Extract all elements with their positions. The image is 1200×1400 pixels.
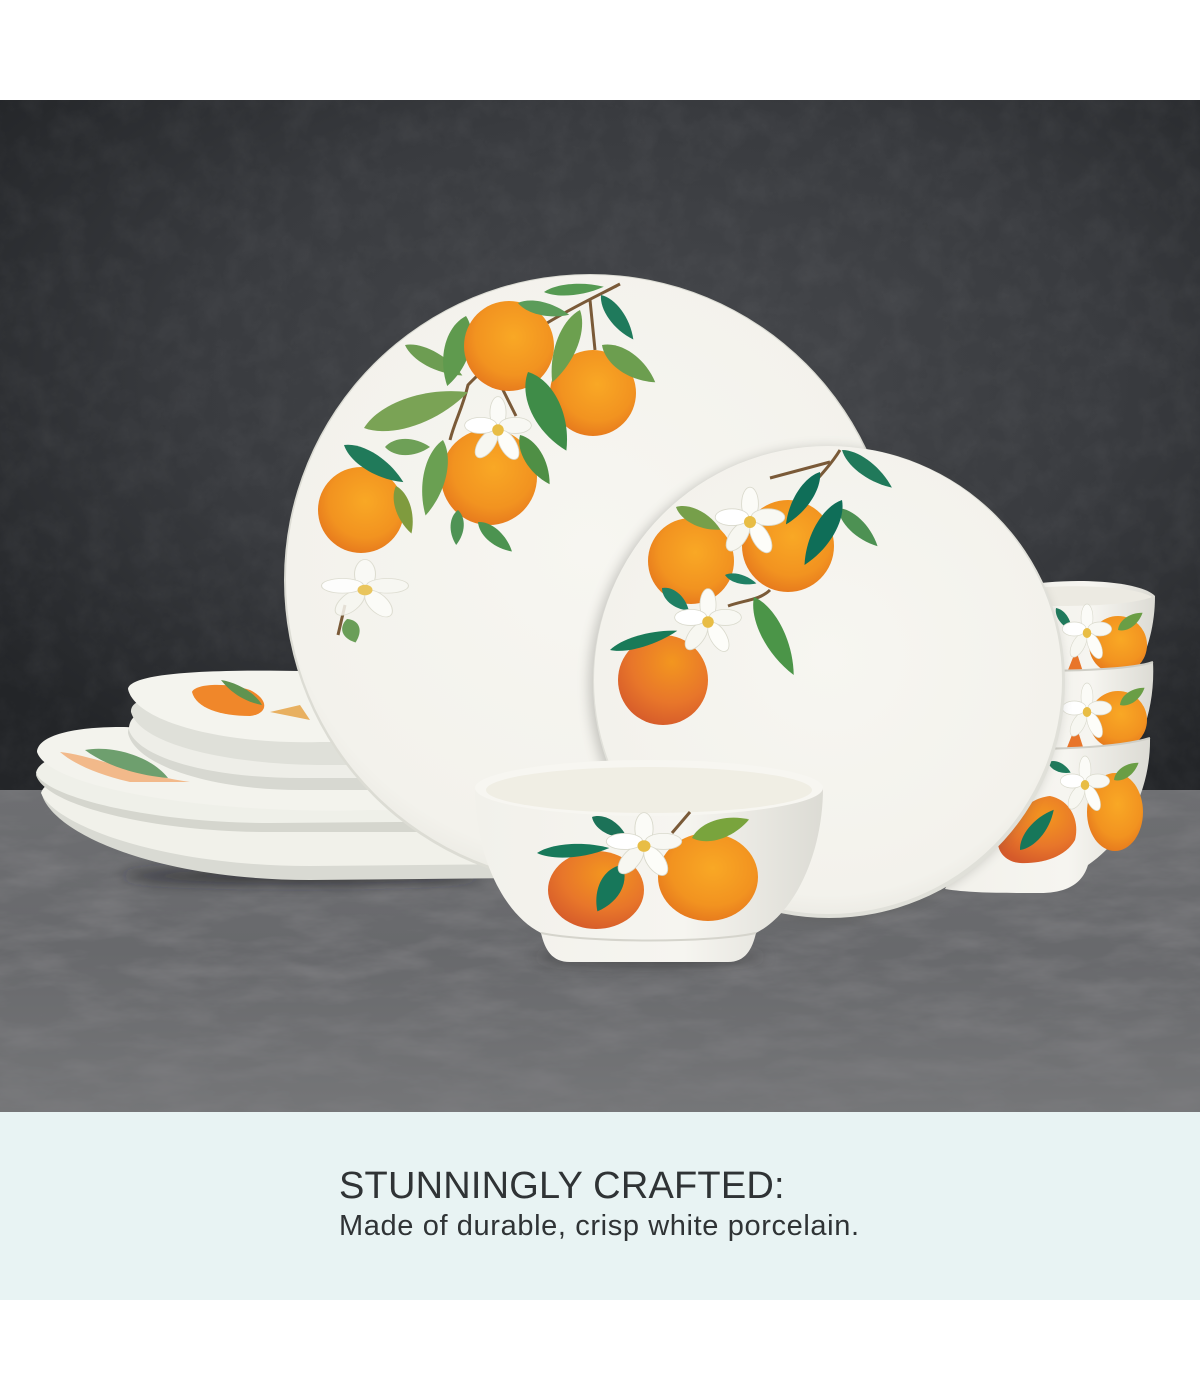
left stack of plates [36, 671, 520, 883]
top bowl [1000, 581, 1155, 680]
caption heading: STUNNINGLY CRAFTED: [339, 1165, 785, 1207]
large dinner plate [284, 274, 896, 886]
caption description: Made of durable, crisp white porcelain. [339, 1210, 860, 1242]
front bowl pattern: oranges and blossom [537, 810, 758, 929]
right stack of bowls [945, 581, 1155, 893]
table surface [0, 790, 1200, 1112]
salad plate pattern: branch with oranges [608, 444, 896, 725]
large plate pattern: branch with oranges [318, 281, 661, 645]
caption text [339, 1165, 860, 1242]
background wall [0, 100, 1200, 792]
salad plate [589, 444, 1065, 920]
left stack pattern: oranges and leaves [60, 680, 310, 782]
front bowl [475, 760, 823, 964]
bottom bowl [945, 738, 1150, 893]
middle bowl [1000, 662, 1153, 755]
caption band background [0, 1112, 1200, 1300]
